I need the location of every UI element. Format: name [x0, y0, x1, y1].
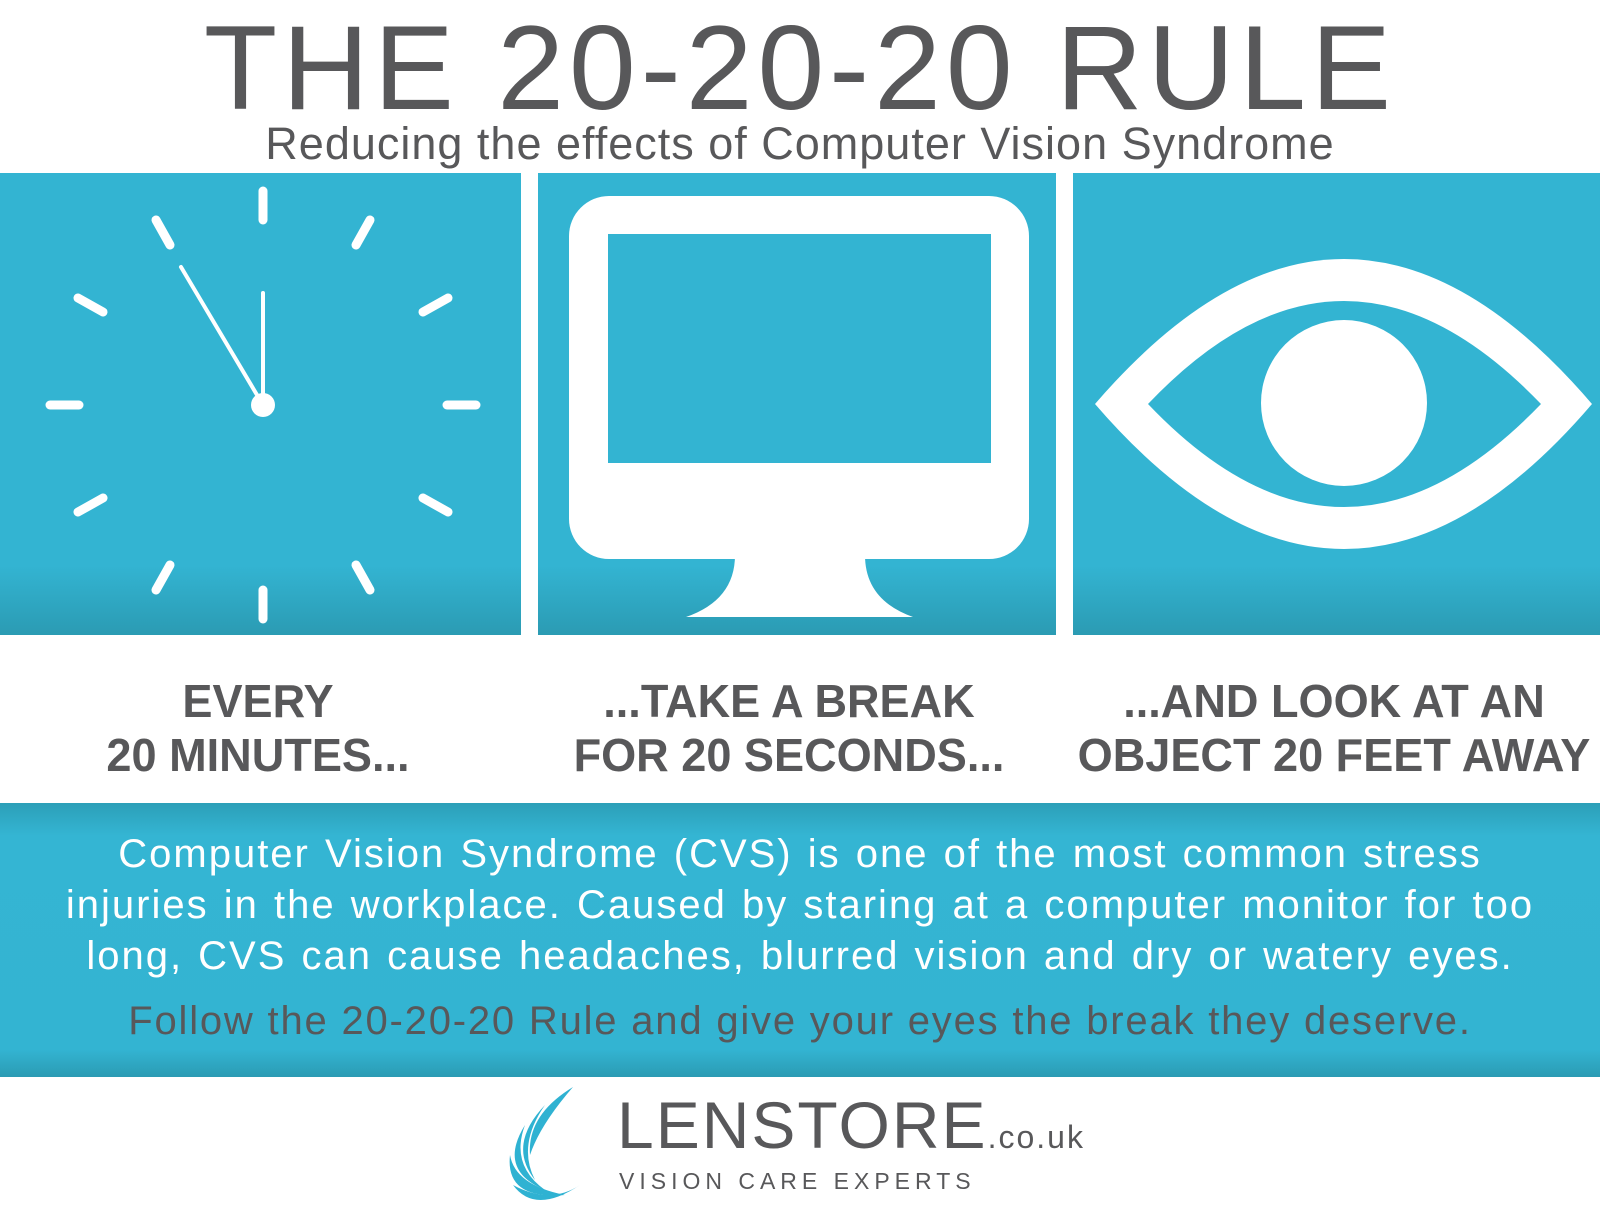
subtitle: Reducing the effects of Computer Vision Syndrome — [265, 118, 1335, 169]
call to action: Follow the 20-20-20 Rule and give your eyes the break they deserve. — [128, 999, 1472, 1043]
title: THE 20-20-20 RULE — [204, 1, 1396, 135]
label: every 20 minutes: 20 MINUTES... — [106, 729, 410, 781]
brand name: LENSTORE.co.uk — [617, 1088, 1085, 1162]
panel: eye — [1073, 173, 1600, 635]
CVS description: Computer Vision Syndrome (CVS) is one of the most common stress — [118, 832, 1482, 876]
label: every 20 minutes — [106, 675, 410, 781]
logo — [510, 1087, 1085, 1200]
label: look 20 feet: OBJECT 20 FEET AWAY — [1078, 729, 1590, 781]
tagline: VISION CARE EXPERTS — [619, 1168, 976, 1194]
CVS description — [66, 832, 1534, 978]
label: look 20 feet: ...AND LOOK AT AN — [1123, 675, 1545, 727]
label: take a break: FOR 20 SECONDS... — [574, 729, 1004, 781]
label: take a break — [574, 675, 1004, 781]
panel: clock — [0, 173, 521, 635]
label: every 20 minutes: EVERY — [182, 675, 334, 727]
label: look 20 feet — [1078, 675, 1590, 781]
CVS description: long, CVS can cause headaches, blurred vision and dry or watery eyes. — [86, 934, 1514, 978]
CVS description: injuries in the workplace. Caused by staring at a computer monitor for too — [66, 883, 1534, 927]
panel: monitor — [538, 173, 1056, 635]
label: take a break: ...TAKE A BREAK — [603, 675, 975, 727]
icon: swoosh — [510, 1087, 579, 1200]
info band — [0, 803, 1600, 1077]
